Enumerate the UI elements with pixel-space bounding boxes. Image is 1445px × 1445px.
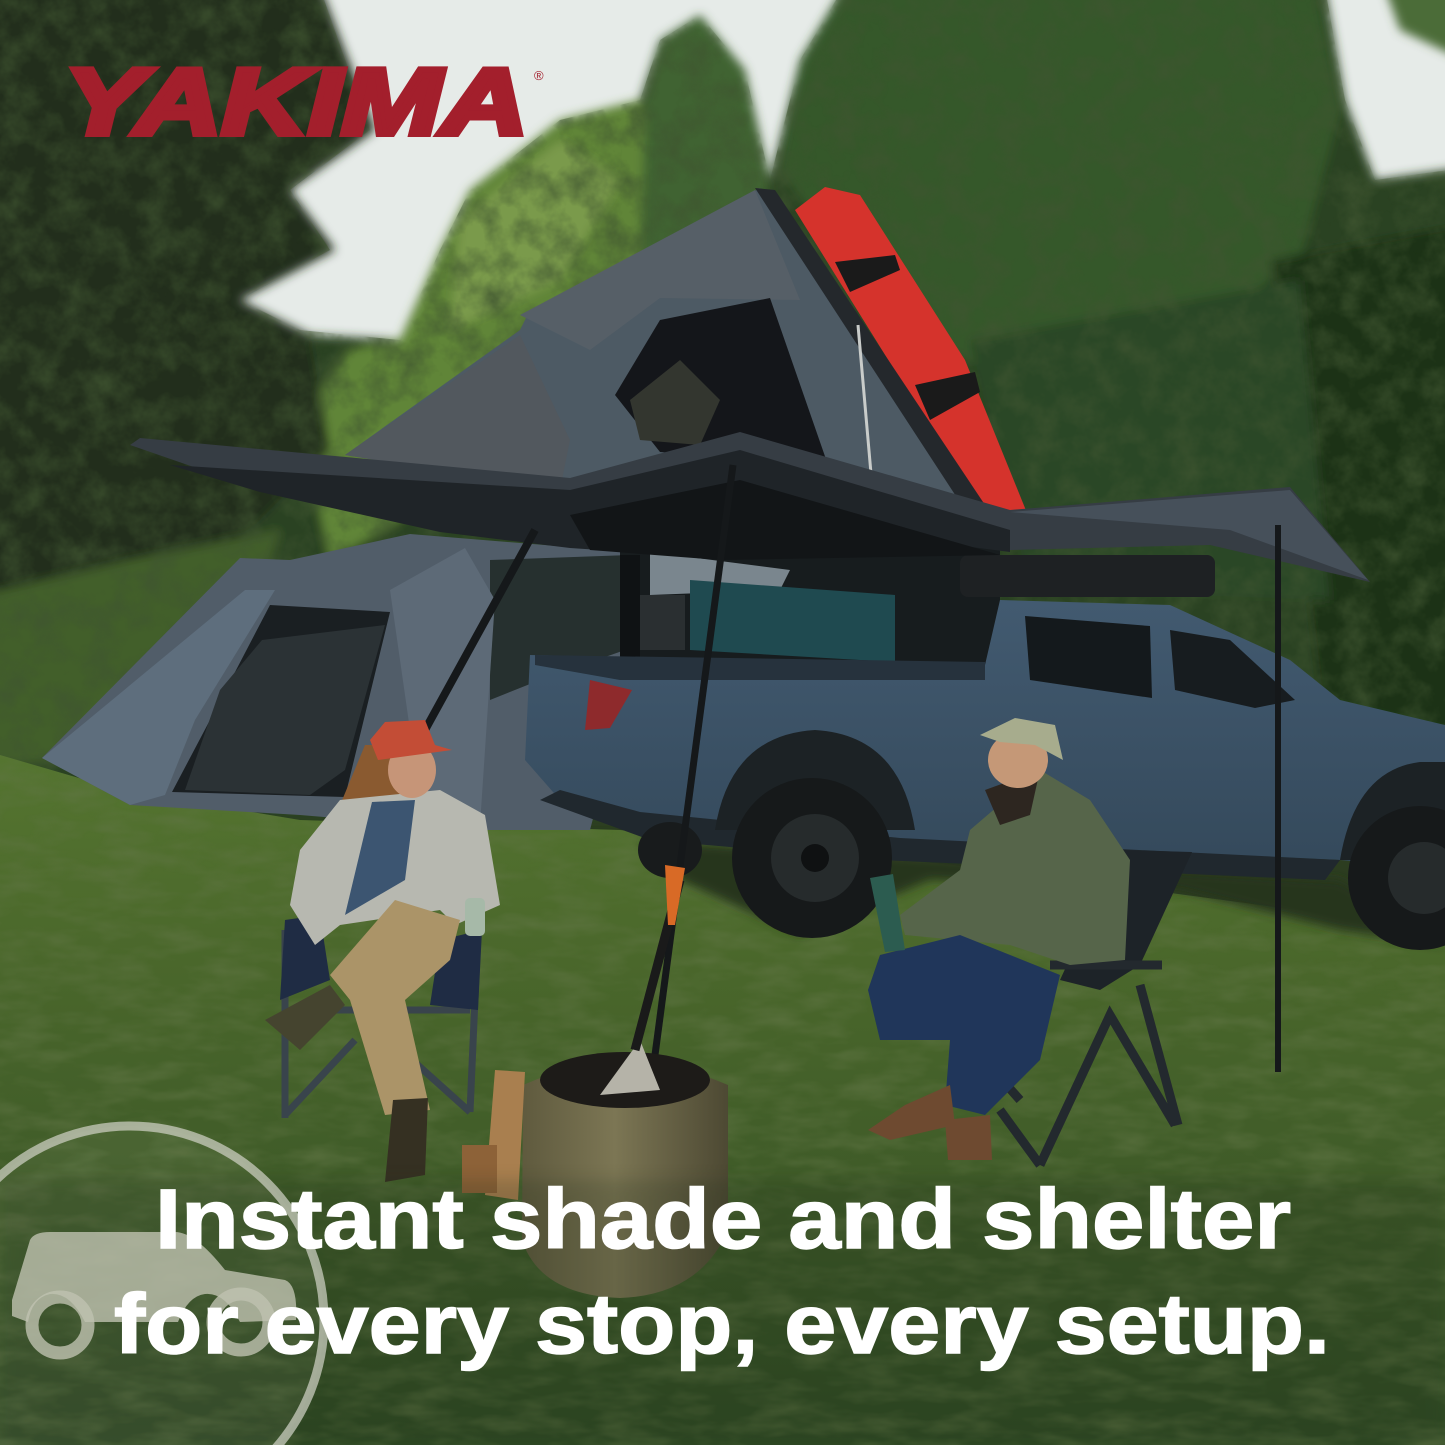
headline <box>114 1172 1330 1371</box>
trees background <box>0 0 1445 820</box>
fire pit <box>462 1040 728 1298</box>
jeans <box>868 935 1060 1115</box>
red kayak <box>795 187 1040 545</box>
cab windows <box>1025 616 1152 698</box>
shadow under truck <box>640 840 1445 945</box>
head <box>988 732 1048 788</box>
head <box>388 742 436 798</box>
rear annex tent <box>42 534 640 830</box>
lower rocker <box>540 790 1340 880</box>
truck <box>525 600 1445 880</box>
wheel arch front <box>1340 762 1445 860</box>
rooftop tent <box>345 188 985 510</box>
chair <box>1060 850 1192 990</box>
bed top <box>535 655 985 680</box>
cap <box>980 718 1063 760</box>
hat <box>370 720 452 760</box>
right man in chair <box>868 718 1192 1165</box>
chair <box>285 930 478 1118</box>
hair <box>338 745 405 822</box>
trousers <box>330 900 460 1115</box>
left man in chair <box>265 720 500 1182</box>
sky <box>0 0 1445 800</box>
logo: Yakima: ® <box>534 68 544 83</box>
truck wheels <box>638 778 1445 950</box>
rear taillight <box>585 680 632 730</box>
boots <box>868 1085 955 1140</box>
hoodie <box>900 770 1130 965</box>
beard <box>985 770 1040 825</box>
awning <box>130 432 1370 582</box>
darkening at bottom of grass <box>0 1180 1445 1445</box>
bottle <box>870 874 905 952</box>
gear behind cab and under awning <box>620 545 1215 680</box>
logo: Yakima: YAKIMA <box>64 49 528 154</box>
wheel arch rear <box>715 730 915 830</box>
vehicle silhouette <box>12 1232 296 1322</box>
boots <box>265 985 345 1050</box>
axe <box>635 865 685 1050</box>
headline: Instant shade and shelter <box>155 1172 1291 1266</box>
icon: vehicle with awning badge <box>0 1126 324 1445</box>
grass <box>0 750 1445 1445</box>
jacket <box>290 790 500 945</box>
hand and can <box>465 898 485 936</box>
awning poles <box>425 465 1278 1072</box>
headline: for every stop, every setup. <box>114 1277 1330 1371</box>
